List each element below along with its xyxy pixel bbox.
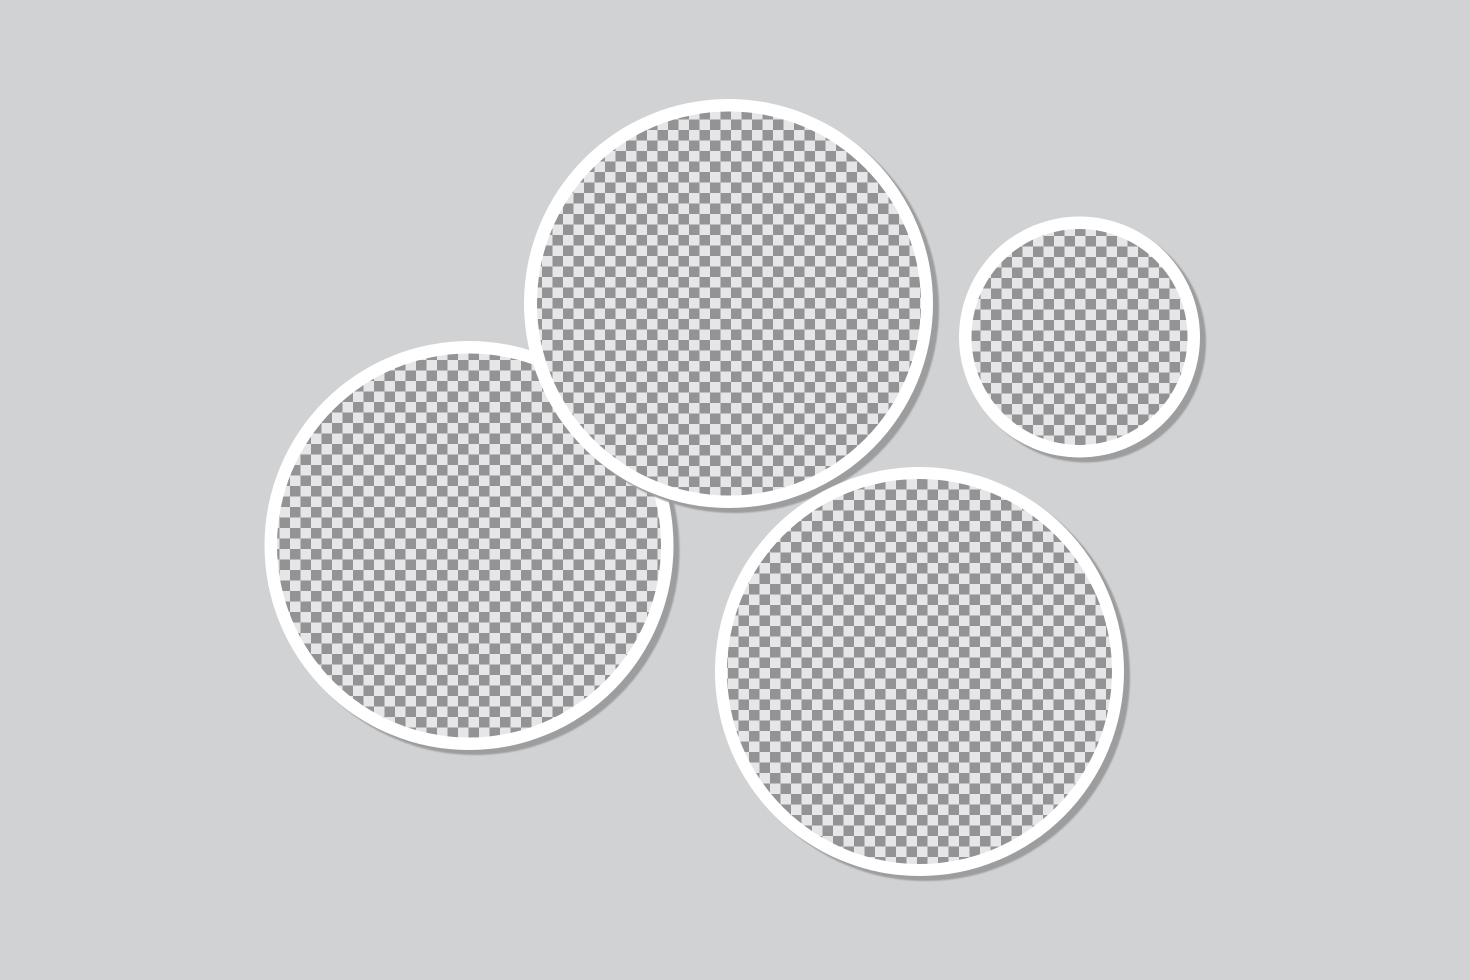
left circle frame: [264, 341, 680, 755]
bottom circle frame: [715, 467, 1130, 881]
small right circle frame: [959, 216, 1206, 462]
top circle frame: [524, 99, 939, 513]
